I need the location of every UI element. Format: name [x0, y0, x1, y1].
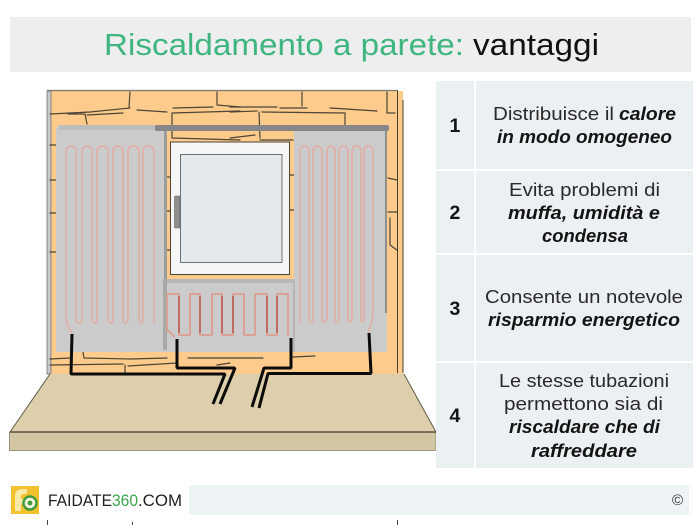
row 2: condensa: [542, 226, 628, 246]
wall: [47, 90, 403, 374]
left heating coil: [66, 146, 154, 333]
brick lines: [50, 92, 397, 373]
row 1: Distribuisce il: [493, 104, 614, 124]
row 1: [436, 81, 693, 169]
row 2: [436, 171, 693, 253]
row 1: 1: [450, 115, 460, 137]
window handle: [174, 196, 180, 228]
footer logo text: FAIDATE: [48, 491, 112, 510]
title: green part: Riscaldamento a parete:: [104, 27, 464, 62]
lower heating coil: [167, 294, 288, 337]
row 3: Consente un notevole: [485, 287, 683, 307]
row 4: riscaldare che di: [509, 417, 661, 437]
lower wall panel: [163, 279, 295, 352]
right heating coil: [300, 146, 373, 333]
row 1: calore: [619, 104, 676, 124]
row 4: permettono sia di: [504, 394, 663, 414]
floor: [10, 374, 436, 450]
footer logo text: 360: [112, 491, 138, 510]
row 4: raffreddare: [531, 441, 637, 461]
footer bar with copyright: [189, 485, 689, 515]
footer bar with copyright: ©: [672, 492, 683, 509]
table of advantages: [436, 81, 693, 468]
footer logo text: [48, 491, 182, 510]
row 2: Evita problemi di: [509, 180, 660, 200]
title: black part: vantaggi: [473, 27, 599, 62]
footer: [11, 485, 689, 515]
footer logo text: .COM: [138, 491, 182, 510]
footer logo icon: [11, 486, 39, 514]
row 4: 4: [450, 405, 460, 427]
window sill: [155, 125, 389, 131]
window: [170, 142, 290, 274]
row 3: [436, 255, 693, 361]
row 3: risparmio energetico: [488, 310, 680, 330]
left wall panel: [56, 125, 167, 352]
bottom tick marks: [48, 520, 398, 525]
row 4: [436, 363, 693, 468]
row 4: Le stesse tubazioni: [499, 371, 669, 391]
black pipes: [71, 333, 371, 408]
row 1: in modo omogeneo: [497, 127, 672, 147]
right wall panel: [294, 131, 387, 352]
title bar: [10, 17, 691, 72]
illustration: heated wall: [10, 90, 436, 450]
row 2: 2: [450, 202, 460, 224]
row 2: muffa, umidità e: [508, 203, 660, 223]
row 3: 3: [450, 298, 460, 320]
